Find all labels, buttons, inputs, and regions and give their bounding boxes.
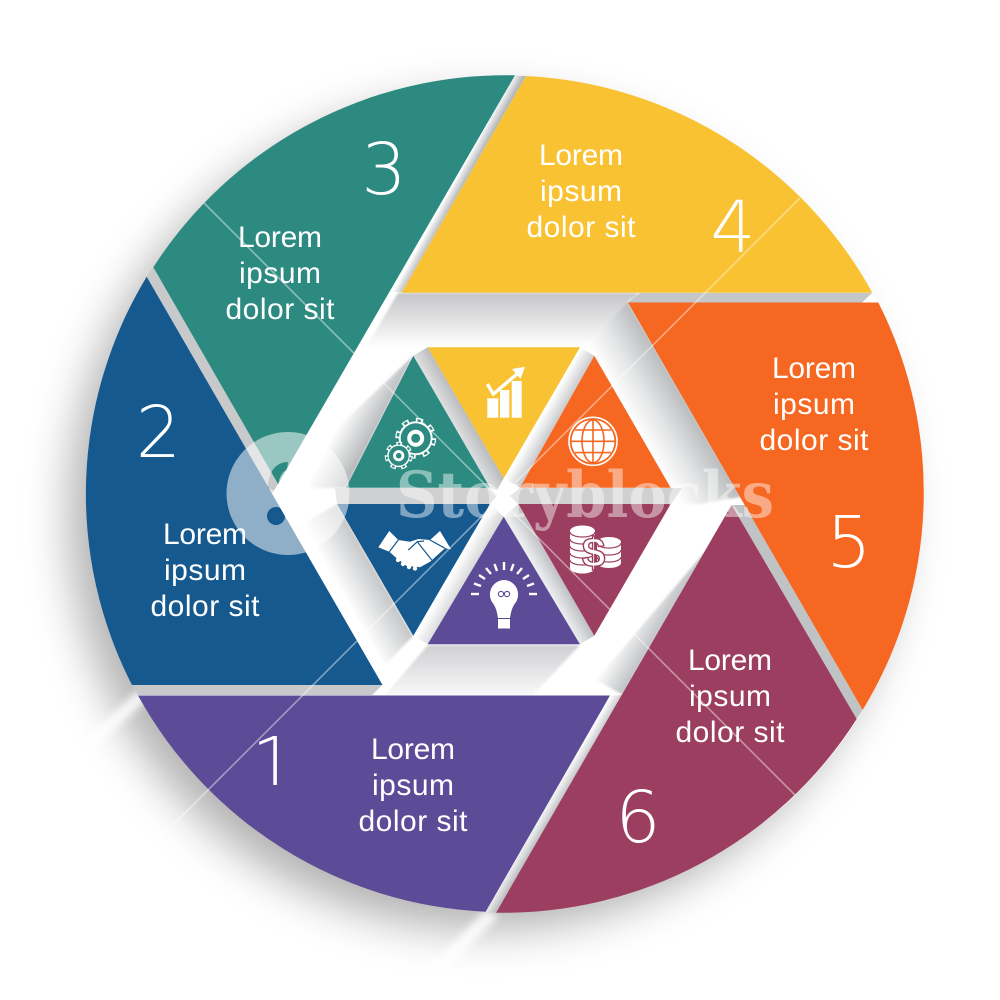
segment 4: yellow: ipsum xyxy=(540,175,622,208)
icon: coins xyxy=(570,526,621,576)
inner triangle: blue with handshake icon xyxy=(337,504,490,636)
label 6: Lorem xyxy=(688,644,772,677)
inner triangle: orange with globe icon xyxy=(520,356,671,488)
segment 6: maroon: dolor sit xyxy=(676,716,785,749)
label 2: Lorem xyxy=(163,518,247,551)
segment 2: blue xyxy=(86,277,382,685)
number 3: 3 xyxy=(361,128,407,211)
segment 3: teal: dolor sit xyxy=(226,293,335,326)
grey gaps between outer segments xyxy=(132,76,872,913)
circle drop shadow xyxy=(69,98,901,930)
label 5: Lorem xyxy=(772,352,856,385)
segment 2: blue: ipsum xyxy=(164,554,246,587)
segment 6: maroon xyxy=(496,505,857,913)
number 2: 2 xyxy=(136,391,181,474)
label 3: Lorem xyxy=(238,221,322,254)
number 5: 5 xyxy=(826,501,872,584)
inner triangle: teal with gears icon xyxy=(346,356,490,488)
segment 5: orange: ipsum xyxy=(773,388,855,421)
watermark text: Storyblocks xyxy=(396,458,774,533)
segment 1: purple: ipsum xyxy=(372,769,454,802)
segment 4: yellow: dolor sit xyxy=(526,211,636,244)
segment 6: maroon: ipsum xyxy=(689,680,771,713)
white slashes through the shadow xyxy=(80,690,499,972)
segment 3: teal xyxy=(153,75,515,484)
icon: gears xyxy=(387,420,434,468)
segment 3: teal: ipsum xyxy=(239,257,321,290)
band shading between outer and inner rings xyxy=(300,293,741,695)
inner triangle: yellow with chart icon xyxy=(428,347,580,478)
segment 5: orange xyxy=(628,302,924,710)
icon: handshake xyxy=(378,531,451,571)
icon: globe xyxy=(569,417,617,465)
segment 2: blue: dolor sit xyxy=(150,590,260,623)
icon: coins: $ xyxy=(582,529,605,576)
segment 5: orange: dolor sit xyxy=(760,424,869,457)
watermark logo xyxy=(227,432,350,555)
segment 1: purple: dolor sit xyxy=(358,805,468,838)
watermark crossing lines xyxy=(160,198,800,838)
inner triangle: maroon with coins icon xyxy=(518,504,671,636)
number 4: 4 xyxy=(710,186,756,269)
number 1: 1 xyxy=(251,722,297,805)
mask for numeral foot xyxy=(250,785,296,792)
number 6: 6 xyxy=(615,776,661,859)
segment 4: yellow xyxy=(402,76,872,293)
inner triangle: purple with light bulb icon xyxy=(428,517,580,644)
segment 1: purple xyxy=(138,696,610,912)
white disc base xyxy=(87,76,923,912)
label 1: Lorem xyxy=(371,733,455,766)
icon: rising chart xyxy=(487,367,525,418)
label 4: Lorem xyxy=(539,139,623,172)
icon: light bulb xyxy=(471,562,537,628)
